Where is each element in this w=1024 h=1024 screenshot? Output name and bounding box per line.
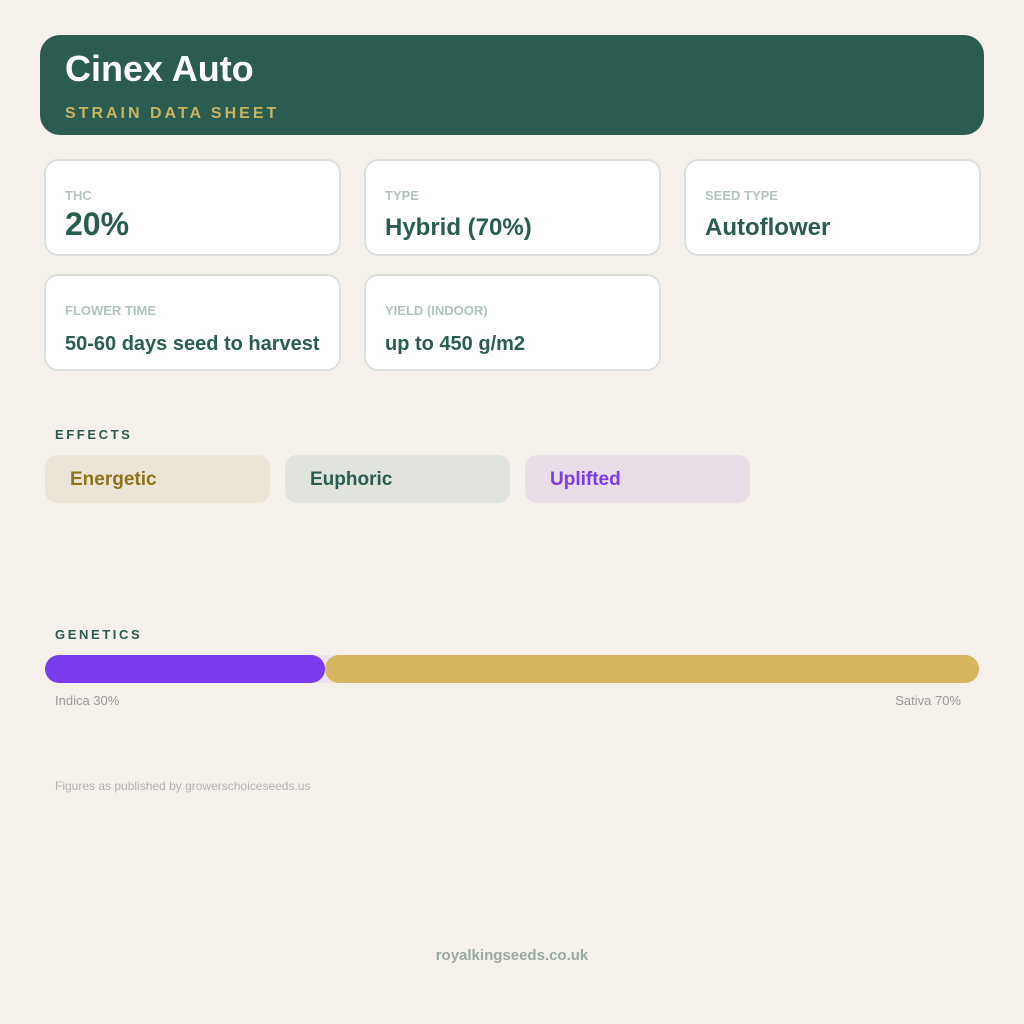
value: 20%: 20% bbox=[65, 206, 129, 242]
genetics bar bbox=[45, 655, 979, 683]
effect pill: uplifted: Uplifted bbox=[550, 469, 621, 490]
value: yield: up to 450 g/m2 bbox=[385, 333, 525, 355]
label: yield: YIELD (INDOOR) bbox=[385, 303, 488, 318]
effect pill: energetic: Energetic bbox=[70, 469, 157, 490]
label: flower time: FLOWER TIME bbox=[65, 303, 156, 318]
source note: Figures as published by growerschoiceseeds.us bbox=[55, 779, 310, 793]
label: seed type: SEED TYPE bbox=[705, 188, 778, 203]
genetics heading: GENETICS bbox=[55, 627, 142, 642]
subtitle: STRAIN DATA SHEET bbox=[65, 105, 279, 122]
effect pill: uplifted bbox=[525, 455, 750, 503]
value: flower time: 50-60 days seed to harvest bbox=[65, 333, 320, 355]
effect pill: euphoric bbox=[285, 455, 510, 503]
stat card: seed type bbox=[684, 159, 981, 256]
title: Cinex Auto bbox=[65, 48, 254, 89]
indica label: Indica 30% bbox=[55, 693, 119, 708]
sativa label: Sativa 70% bbox=[895, 693, 961, 708]
indica segment bbox=[45, 655, 325, 683]
stat card: yield bbox=[364, 274, 661, 371]
footer domain: royalkingseeds.co.uk bbox=[436, 947, 588, 964]
effect pill: energetic bbox=[45, 455, 270, 503]
stat card: THC bbox=[44, 159, 341, 256]
effects heading: EFFECTS bbox=[55, 427, 132, 442]
header banner bbox=[40, 35, 984, 135]
stat card: type bbox=[364, 159, 661, 256]
value: hybrid: Hybrid (70%) bbox=[385, 214, 532, 241]
label: THC: THC bbox=[65, 188, 92, 203]
label: type: TYPE bbox=[385, 188, 419, 203]
effect pill: euphoric: Euphoric bbox=[310, 469, 392, 490]
value: autoflower: Autoflower bbox=[705, 214, 830, 241]
stat card: flower time bbox=[44, 274, 341, 371]
sativa segment bbox=[325, 655, 979, 683]
